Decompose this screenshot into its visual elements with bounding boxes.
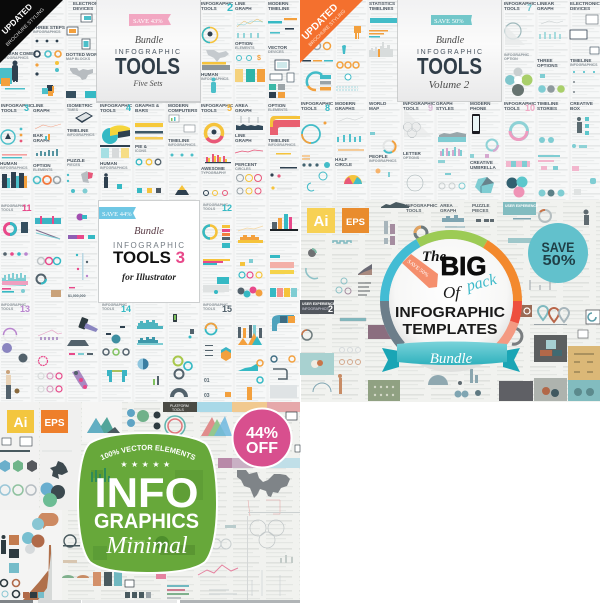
- mini-page headings, first bundle: TIMELINE: [168, 138, 189, 143]
- mini-page headings, first bundle: INFOGRAPHICS: [1, 56, 29, 60]
- script: Of: Of: [443, 283, 462, 302]
- badge: updated brochure styling: BROCHURE STYLING: [5, 7, 46, 48]
- panel: Infographic Tools 3: [0, 200, 300, 402]
- mini-page headings, second bundle: MODERN: [470, 101, 491, 106]
- mini-page headings, second bundle: OPTION: [504, 57, 518, 61]
- template thumbnails: TOOLS: [172, 408, 184, 412]
- mini-page headings, second bundle: INFOGRAPHIC: [403, 101, 436, 106]
- icon: EPS format tile: EPS: [44, 418, 65, 429]
- heading: Tools 3: TOOLS 3: [113, 248, 185, 267]
- template thumbnails: [300, 202, 600, 401]
- mini-page headings, first bundle: TOOLS: [201, 108, 217, 113]
- mini-page headings, first bundle: MAP BLOCKS: [66, 57, 91, 61]
- mini-page graphics, second bundle: [302, 15, 599, 198]
- mini-page headings, second bundle: STORIES: [537, 106, 557, 111]
- mini-page headings, first bundle: GRAPH: [235, 138, 252, 143]
- ribbon: save on disc: [402, 254, 438, 288]
- mini-page headings, first bundle: TIMELINE: [268, 6, 289, 11]
- mini-page headings, first bundle: ELECTRONIC: [73, 1, 104, 6]
- template thumbnails: USER EXPERIENCE: [302, 302, 336, 306]
- heading: Tools: TOOLS: [115, 53, 180, 79]
- mini-page headings, second bundle: TOOLS: [301, 106, 317, 111]
- mini-page headings, third bundle: TOOLS: [1, 307, 14, 311]
- mini-page headings, second bundle: ELECTRONIC: [570, 1, 600, 6]
- mini-page headings, first bundle: INFOGRAPHIC: [201, 1, 234, 6]
- mini-page graphics, third bundle: 01: [204, 378, 210, 384]
- mini-page headings, first bundle: DEVICES: [73, 6, 93, 11]
- mini-page headings, first bundle: OPTION: [33, 163, 51, 168]
- mini-page headings, first bundle: TOOLS: [1, 108, 17, 113]
- mini-page headings, second bundle: STATISTICS: [369, 1, 395, 6]
- icon: Ai format tile: Ai: [314, 213, 328, 230]
- mini-page headings, second bundle: TOOLS: [504, 6, 520, 11]
- mini-page headings, first bundle: BAR: [33, 133, 44, 138]
- badge: 44% off: [232, 408, 292, 468]
- mini-page headings, second bundle: PHONE: [470, 106, 486, 111]
- mini-page headings, first bundle: TIMELINE: [268, 138, 289, 143]
- icon: Ai format tile: Ai: [14, 414, 28, 430]
- script: Bundle: Bundle: [135, 35, 164, 46]
- mini-page headings, second bundle: 9: [428, 103, 433, 113]
- mini-page headings, second bundle: GRAPH: [537, 6, 554, 11]
- mini-page headings, first bundle: PIE &: [135, 144, 148, 149]
- mini-page headings, first bundle: HUMAN: [201, 72, 219, 77]
- template thumbnails: INFOGRAPHIC: [406, 203, 438, 208]
- mini-page headings, third bundle: TOOLS: [203, 307, 216, 311]
- mini-page graphics, first bundle: $: [257, 55, 261, 62]
- script: Bundle: Bundle: [134, 226, 164, 237]
- panel: The Big Pack of Infographic Templates: [300, 200, 600, 402]
- script: for Illustrator: for Illustrator: [122, 273, 176, 283]
- heading: Infographic: INFOGRAPHIC: [395, 304, 505, 321]
- ribbon: bundle: [382, 342, 520, 372]
- template thumbnails: USER EXPERIENCE: [505, 204, 539, 208]
- mini-page headings, first bundle: ISOMETRIC: [67, 103, 93, 108]
- mini-page headings, second bundle: CREATIVE: [570, 101, 593, 106]
- mini-page headings, second bundle: LINEAR: [537, 1, 555, 6]
- template thumbnails: [0, 402, 300, 603]
- mini-page headings, first bundle: TOOLS: [201, 6, 217, 11]
- mini-page headings, first bundle: MODERN: [268, 1, 289, 6]
- badge: updated brochure styling: UPDATED: [0, 2, 34, 36]
- heading: Graphics: GRAPHICS: [94, 509, 199, 533]
- mini-page headings, second bundle: HALF: [335, 157, 347, 162]
- mini-page headings, first bundle: LINE: [235, 133, 245, 138]
- mini-page graphics, third bundle: [2, 214, 298, 400]
- mini-page headings, second bundle: OPTIONS: [537, 63, 558, 68]
- icon: Ai format tile: [307, 208, 335, 233]
- mini-page headings, second bundle: INFOGRAPHICS: [570, 63, 598, 67]
- mini-page headings, first bundle: INFOGRAPHICS: [201, 77, 229, 81]
- badge: 44% off: OFF: [246, 440, 278, 457]
- template thumbnails: INFOGRAPHICS: [302, 307, 329, 311]
- template thumbnails: PIECES: [472, 208, 489, 213]
- mini-page headings, third bundle: TOOLS: [102, 307, 115, 311]
- mini-page headings, second bundle: TOOLS: [504, 106, 520, 111]
- mini-page headings, first bundle: PERCENT: [235, 162, 257, 167]
- mini-page headings, first bundle: COMPUTERS: [168, 108, 197, 113]
- mini-page headings, third bundle: 14: [121, 304, 131, 314]
- badge: updated brochure styling, orange: [300, 0, 363, 63]
- icon: EPS format tile: [342, 208, 369, 233]
- mini-page headings, first bundle: GRAPH: [235, 108, 252, 113]
- mini-page headings, second bundle: OPTIONS: [403, 156, 420, 160]
- mini-page headings, second bundle: STYLES: [436, 106, 454, 111]
- heading: Templates: TEMPLATES: [402, 321, 498, 338]
- mini-page headings, second bundle: 7: [527, 3, 532, 13]
- mini-page headings, third bundle: INFOGRAPHIC: [1, 303, 27, 307]
- mini-page headings, third bundle: TOOLS: [1, 208, 14, 212]
- mini-page headings, first bundle: TIMELINE: [67, 128, 88, 133]
- mini-page headings, second bundle: INFOGRAPHICS: [369, 159, 397, 163]
- mini-page headings, second bundle: TIMELINES: [369, 6, 394, 11]
- script: Five Sets: Five Sets: [132, 79, 163, 88]
- mini-page headings, first bundle: MODERN: [168, 103, 189, 108]
- icon: Ai format tile: [7, 410, 34, 433]
- mini-page headings, second bundle: BOX: [570, 106, 581, 111]
- mini-page headings, first bundle: DOTTED WORLD: [66, 52, 104, 57]
- mini-page headings, first bundle: HUMAN: [0, 161, 18, 166]
- mini-page headings, second bundle: CIRCLE: [335, 162, 352, 167]
- script: pack: pack: [464, 271, 499, 295]
- template thumbnails: PLATFORM: [170, 404, 189, 408]
- heading: Infographic: INFOGRAPHIC: [417, 49, 482, 56]
- mini-page headings, second bundle: MAP: [369, 106, 379, 111]
- template thumbnails: 2: [328, 304, 333, 314]
- mini-page headings, second bundle: TIMELINE: [570, 58, 591, 63]
- badge: save 50%: [528, 223, 588, 283]
- mini-page headings, second bundle: INFOGRAPHIC: [504, 101, 537, 106]
- mini-page headings, first bundle: [0, 1, 296, 175]
- mini-page headings, second bundle: 8: [325, 103, 330, 113]
- mini-page headings, third bundle: 15: [222, 304, 232, 314]
- script: Minimal: Minimal: [105, 533, 188, 559]
- ribbon: save 43%: SAVE 43%: [133, 18, 163, 25]
- mini-page headings, second bundle: INFOGRAPHIC: [301, 101, 334, 106]
- badge: updated brochure styling, orange: BROCHURE STYLING: [307, 8, 347, 48]
- ribbon: save 50%: SAVE 50%: [434, 18, 464, 25]
- badge: updated brochure styling, orange: UPDATED: [300, 2, 340, 42]
- icon: EPS format tile: EPS: [346, 217, 365, 228]
- mini-page headings, third bundle: [1, 203, 232, 314]
- template thumbnails: TOOLS: [406, 208, 421, 213]
- template thumbnails: AREA: [440, 203, 454, 208]
- mini-page headings, first bundle: GRAPH: [33, 108, 50, 113]
- script: Volume 2: Volume 2: [429, 79, 470, 91]
- mini-page headings, second bundle: PEOPLE: [369, 154, 388, 159]
- mini-page headings, third bundle: INFOGRAPHIC: [102, 303, 128, 307]
- mini-page headings, first bundle: BARS: [135, 108, 148, 113]
- mini-page headings, first bundle: 2: [227, 2, 233, 14]
- mini-page graphics, first bundle: [0, 14, 300, 196]
- mini-page headings, second bundle: THREE: [537, 58, 553, 63]
- heading: Tools: TOOLS: [417, 53, 482, 79]
- mini-page headings, second bundle: INFOGRAPHIC: [504, 1, 537, 6]
- mini-page headings, first bundle: INFOGRAPHICS: [0, 166, 28, 170]
- mini-page headings, second bundle: TIMELINE: [537, 101, 558, 106]
- mini-page headings, second bundle: GRAPHS: [335, 106, 355, 111]
- mini-page headings, third bundle: 12: [222, 203, 232, 213]
- mini-page headings, second bundle: TOOLS: [403, 106, 419, 111]
- mini-page graphics, third bundle: 03: [204, 393, 210, 399]
- mini-page headings, first bundle: INFOGRAPHICS: [33, 30, 61, 34]
- mini-page headings, second bundle: LETTER: [403, 151, 422, 156]
- script: Bundle: Bundle: [430, 351, 473, 367]
- mini-page headings, third bundle: INFOGRAPHIC: [1, 204, 27, 208]
- mini-page headings, first bundle: 5: [227, 103, 232, 113]
- mini-page headings, first bundle: GRAPH: [235, 6, 252, 11]
- mini-page headings, first bundle: INFOGRAPHICS: [100, 166, 128, 170]
- mini-page headings, first bundle: TIMES: [67, 108, 79, 112]
- mini-page headings, first bundle: TOOLS: [100, 108, 116, 113]
- mini-page headings, first bundle: PIECES: [67, 163, 81, 167]
- mini-page headings, first bundle: INFOGRAPHIC: [1, 103, 34, 108]
- mini-page headings, first bundle: INFOGRAPHIC: [201, 103, 234, 108]
- mini-page headings, second bundle: MODERN: [335, 101, 356, 106]
- mini-page headings, first bundle: INFOGRAPHICS: [268, 143, 296, 147]
- mini-page headings, first bundle: ELEMENTS: [33, 168, 53, 172]
- mini-page headings, third bundle: 13: [20, 304, 30, 314]
- ribbon: save 44%: SAVE 44%: [102, 211, 132, 218]
- cover card: Infographic Tools Five Sets: [96, 0, 201, 103]
- badge: 44% off: 44%: [246, 425, 278, 442]
- mini-page headings, first bundle: INFOGRAPHICS: [67, 133, 95, 137]
- panel: Infographic Tools Volume 2: [300, 0, 600, 200]
- mini-page headings, first bundle: LINE: [235, 1, 245, 6]
- panel: Info Graphics Minimal: [0, 402, 300, 603]
- heading: Info: INFO: [94, 469, 198, 516]
- mini-page headings, first bundle: ELEMENTS: [235, 46, 255, 50]
- template thumbnails: PUZZLE: [472, 203, 490, 208]
- badge: save 50%: 50%: [542, 253, 576, 269]
- mini-page headings, first bundle: HUMAN: [100, 161, 118, 166]
- panel: Infographic Tools five sets: [0, 0, 300, 200]
- mini-page headings, first bundle: INFOGRAPHICS: [168, 143, 196, 147]
- mini-page headings, first bundle: 3: [24, 103, 29, 113]
- mini-page headings, first bundle: GRAPH: [33, 138, 50, 143]
- script: The: The: [422, 249, 447, 265]
- mini-page headings, second bundle: [301, 1, 600, 170]
- icon: EPS format tile: [41, 410, 68, 433]
- ribbon: save on disc: SAVE 50%: [406, 259, 430, 279]
- mini-page headings, first bundle: 4: [126, 103, 131, 113]
- badge: green cover shape: [77, 432, 218, 574]
- heading: Infographic: INFOGRAPHIC: [115, 49, 180, 56]
- heading: Infographic: INFOGRAPHIC: [113, 241, 184, 250]
- mini-page headings, second bundle: CREATIVE: [470, 160, 493, 165]
- mini-page headings, first bundle: PUZZLE: [67, 158, 85, 163]
- mini-page headings, first bundle: LINE: [33, 103, 43, 108]
- mini-page headings, second bundle: UMBRELLA: [470, 165, 496, 170]
- mini-page headings, first bundle: ELEMENTS: [268, 108, 288, 112]
- mini-page graphics, third bundle: $1,000,000: [68, 294, 86, 298]
- mini-page headings, first bundle: AWESOME: [201, 166, 225, 171]
- mini-page headings, third bundle: INFOGRAPHIC: [203, 203, 229, 207]
- mini-page headings, third bundle: 11: [22, 203, 32, 213]
- mini-page headings, first bundle: CIRCLES: [235, 167, 251, 171]
- mini-page headings, first bundle: ICONS: [135, 149, 147, 153]
- mini-page headings, second bundle: WORLD: [369, 101, 387, 106]
- mini-page headings, first bundle: VECTOR: [268, 45, 288, 50]
- mini-page headings, second bundle: DEVICES: [570, 6, 590, 11]
- badge: updated brochure styling: [0, 0, 63, 63]
- mini-page headings, second bundle: GRAPH: [436, 101, 453, 106]
- cover card: Infographic Tools 3: [98, 200, 200, 303]
- mini-page headings, third bundle: INFOGRAPHIC: [203, 303, 229, 307]
- mini-page headings, first bundle: INFOGRAPHIC: [100, 103, 133, 108]
- mini-page headings, third bundle: TOOLS: [203, 207, 216, 211]
- heading: BIG: BIG: [440, 251, 486, 281]
- badge ring and disc: [380, 230, 522, 372]
- mini-page headings, second bundle: 10: [525, 103, 535, 113]
- mini-page headings, first bundle: DEVICES: [268, 50, 284, 54]
- mini-page headings, first bundle: THREE STEPS: [33, 25, 65, 30]
- cover card: Infographic Tools Volume 2: [397, 0, 502, 102]
- mini-page headings, first bundle: HUMAN COMES: [1, 51, 36, 56]
- mini-page headings, first bundle: AREA: [235, 103, 249, 108]
- mini-page headings, first bundle: TYPOGRAPHY: [201, 171, 227, 175]
- mini-page headings, first bundle: GRAPHS &: [135, 103, 160, 108]
- badge: save 50%: SAVE: [542, 239, 574, 255]
- template thumbnails: GRAPH: [440, 208, 456, 213]
- curved tagline: 100% VECTOR ELEMENTS: [100, 444, 196, 460]
- bottom strip of neighbouring preview pages: [0, 600, 300, 603]
- mini-page headings, first bundle: OPTION: [235, 41, 253, 46]
- mini-page headings, second bundle: INFOGRAPHIC: [504, 53, 530, 57]
- rating stars: ★★★★★: [120, 460, 174, 469]
- script: Bundle: Bundle: [436, 35, 465, 46]
- mini-page headings, first bundle: OPTION: [268, 103, 286, 108]
